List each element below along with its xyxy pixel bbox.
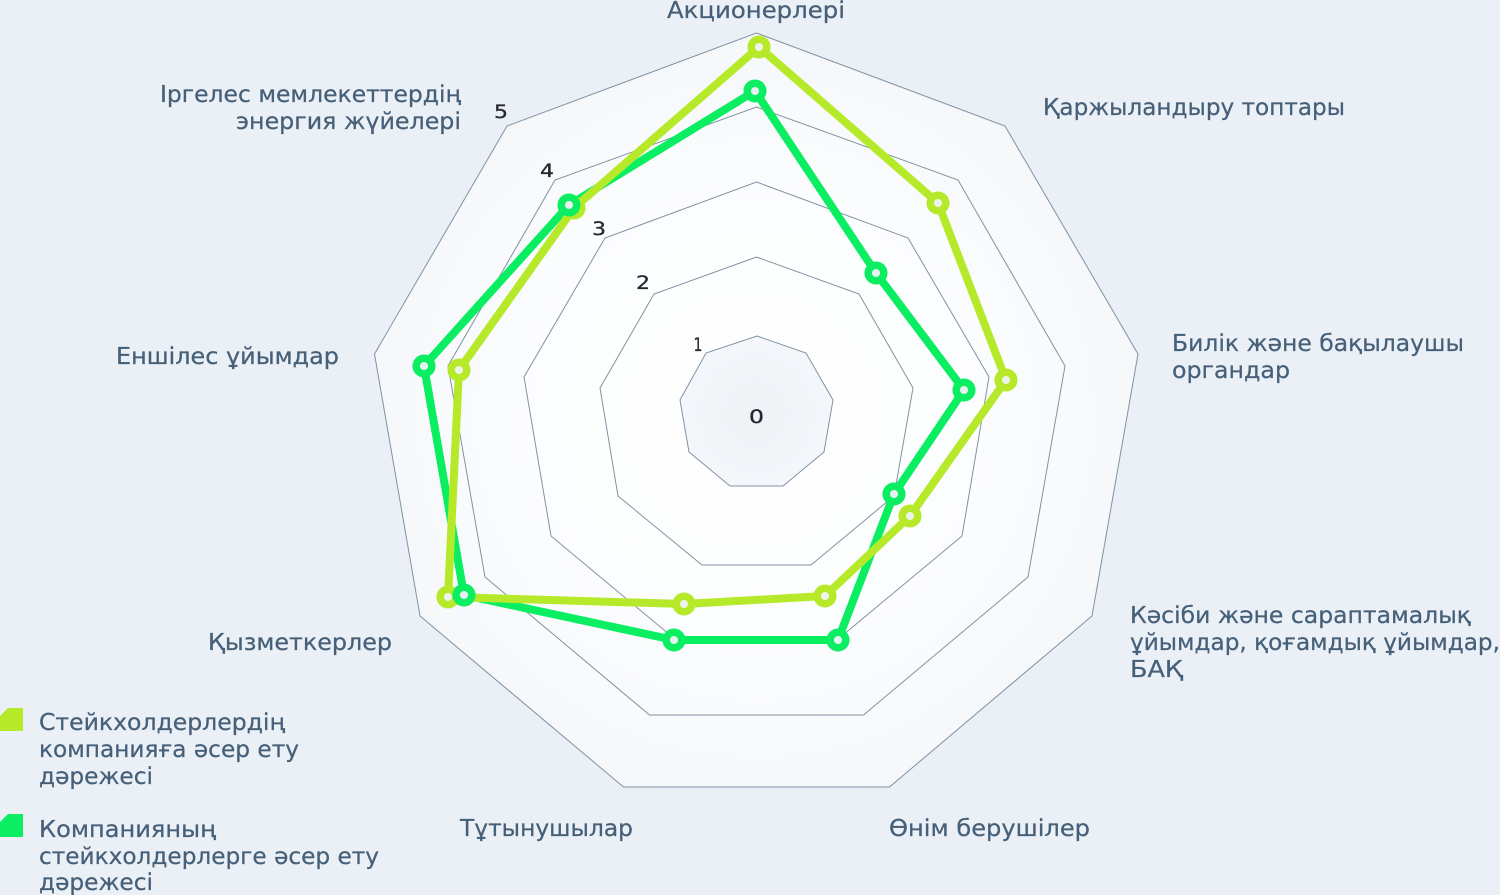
legend swatch: company impact <box>0 814 23 837</box>
axis label: professional organizations, media: ұйымдар, қоғамдық ұйымдар, <box>1130 628 1500 656</box>
axis label: financing groups: Қаржыландыру топтары <box>1043 93 1345 121</box>
axis scale numbers: 0 <box>749 406 764 428</box>
axis label: neighbouring energy systems: Іргелес мемлекеттердің <box>160 80 461 108</box>
axis scale numbers <box>494 101 764 428</box>
axis label: neighbouring energy systems: энергия жүйелері <box>236 107 461 135</box>
axis label: authorities and regulators <box>1172 329 1464 384</box>
axis scale numbers: 4 <box>540 160 554 182</box>
axis label: consumers: Тұтынушылар <box>459 814 633 842</box>
axis label: professional organizations, media: Кәсіби және сараптамалық <box>1130 601 1471 629</box>
legend text: stakeholders impact <box>39 708 299 790</box>
axis label: professional organizations, media <box>1130 601 1500 683</box>
markers: stakeholders impact on company <box>440 39 1014 612</box>
legend text: company impact: Компанияның <box>39 815 216 843</box>
legend text: stakeholders impact: дәрежесі <box>39 762 153 790</box>
series line: company impact on stakeholders <box>424 91 964 640</box>
axis scale numbers: 1 <box>694 334 702 356</box>
legend swatch: stakeholders impact <box>0 708 23 731</box>
legend <box>0 708 379 895</box>
axis label: professional organizations, media: БАҚ <box>1130 655 1183 683</box>
axis scale numbers: 3 <box>592 218 606 240</box>
axis scale numbers: 2 <box>636 272 650 294</box>
axis scale numbers: 5 <box>494 101 508 123</box>
axis label: employees: Қызметкерлер <box>208 628 392 656</box>
legend text: stakeholders impact: компанияға әсер ету <box>39 735 299 763</box>
legend text: company impact: стейкхолдерлерге әсер ету <box>39 842 379 870</box>
axis label: authorities and regulators: органдар <box>1172 356 1290 384</box>
markers: company impact on stakeholders <box>416 83 972 648</box>
axis label: neighbouring energy systems <box>160 80 461 135</box>
axis label: authorities and regulators: Билік және бақылаушы <box>1172 329 1464 357</box>
legend text: company impact <box>39 815 379 895</box>
legend text: stakeholders impact: Стейкхолдерлердің <box>39 708 285 736</box>
radar grid <box>374 33 1138 787</box>
axis label: subsidiaries: Еншілес ұйымдар <box>116 342 339 370</box>
series line: stakeholders impact on company <box>448 47 1006 604</box>
axis label: suppliers: Өнім берушілер <box>889 814 1090 842</box>
